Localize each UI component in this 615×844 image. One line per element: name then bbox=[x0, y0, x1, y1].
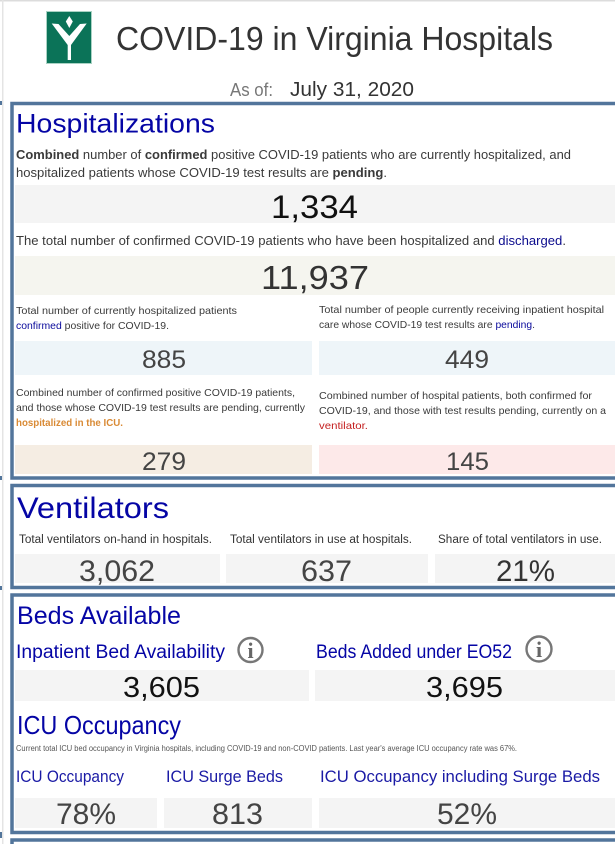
text: discharged description: The total number of confirmed COVID-19 patients who have been hospitalized and discharged. bbox=[16, 233, 566, 248]
stat: share in use: 21% bbox=[496, 555, 555, 588]
stat: ICU occupancy with surge: ICU Occupancy including Surge Beds bbox=[320, 768, 600, 786]
stat: ventilator bbox=[319, 445, 615, 476]
text: confirmed description bbox=[16, 305, 237, 332]
stat: ICU occupancy with surge: 52% bbox=[437, 798, 497, 831]
stat: pending bbox=[319, 341, 615, 375]
text: combined description bbox=[16, 147, 571, 180]
stat: ICU surge beds bbox=[164, 768, 312, 831]
stat: ICU occupancy: ICU Occupancy bbox=[16, 768, 125, 786]
stat: combined hospitalized bbox=[15, 185, 615, 225]
heading: beds available: Beds Available bbox=[17, 602, 181, 630]
text: ventilator description bbox=[319, 390, 606, 432]
text: ICU note: Current total ICU bed occupancy in Virginia hospitals, including COVID-19 and non-COVID patients. Last year's average ICU occupancy rate was 67%. bbox=[16, 744, 517, 753]
panel: ventilators bbox=[12, 486, 615, 588]
text: ICU description: hospitalized in the ICU. bbox=[16, 417, 123, 429]
heading: hospitalizations: Hospitalizations bbox=[16, 108, 215, 138]
stat: pending: 449 bbox=[445, 346, 489, 374]
stat: share in use bbox=[435, 534, 615, 588]
label: inpatient bed availability: Inpatient Bed Availability bbox=[16, 642, 226, 663]
heading: ICU occupancy: ICU Occupancy bbox=[17, 710, 181, 740]
icon: info: i bbox=[247, 638, 254, 663]
text: ICU description: Combined number of confirmed positive COVID-19 patients, bbox=[16, 387, 295, 399]
panel: beds available bbox=[12, 595, 615, 832]
stat: beds added bbox=[315, 670, 615, 704]
stat: confirmed: 885 bbox=[142, 346, 186, 374]
text: pending description: Total number of people currently receiving inpatient hospital bbox=[319, 304, 604, 316]
stat: ventilators on hand: 3,062 bbox=[79, 555, 155, 588]
stat: ICU: 279 bbox=[142, 448, 186, 476]
text: pending description bbox=[319, 304, 604, 331]
as-of date bbox=[230, 79, 414, 101]
stat: combined hospitalized: 1,334 bbox=[271, 189, 358, 225]
text: ventilator description: COVID-19, and those with test results pending, currently on a bbox=[319, 405, 606, 417]
text: pending description: care whose COVID-19 test results are pending. bbox=[319, 319, 535, 331]
icon: info bbox=[526, 636, 552, 662]
text: combined description: Combined number of confirmed positive COVID-19 patients who are currently hospitalized, and bbox=[16, 147, 571, 162]
stat: ICU occupancy: 78% bbox=[56, 798, 116, 831]
stat: ventilators on hand: Total ventilators on-hand in hospitals. bbox=[19, 534, 212, 546]
stat: ICU surge beds: ICU Surge Beds bbox=[166, 768, 283, 786]
as-of date: July 31, 2020 bbox=[290, 79, 414, 101]
stat: ventilators on hand bbox=[15, 534, 220, 588]
stat: ICU occupancy with surge bbox=[319, 768, 615, 831]
stat: ventilators in use: Total ventilators in use at hospitals. bbox=[230, 534, 412, 546]
label: beds added: Beds Added under EO52 bbox=[316, 642, 512, 663]
stat: confirmed bbox=[15, 341, 312, 375]
text: combined description: hospitalized patients whose COVID-19 test results are pending. bbox=[16, 165, 387, 180]
logo bbox=[46, 12, 92, 64]
stat: discharged bbox=[15, 256, 615, 296]
text: ICU description bbox=[16, 387, 306, 429]
text: ventilator description: ventilator. bbox=[319, 420, 368, 432]
heading: ventilators: Ventilators bbox=[17, 492, 169, 525]
stat: ventilators in use: 637 bbox=[301, 555, 352, 588]
text: ventilator description: Combined number of hospital patients, both confirmed for bbox=[319, 390, 592, 402]
stat: ICU occupancy bbox=[15, 768, 157, 831]
text: confirmed description: Total number of currently hospitalized patients bbox=[16, 305, 237, 317]
icon: info: i bbox=[536, 637, 542, 662]
icon: info bbox=[238, 638, 262, 663]
stat: share in use: Share of total ventilators in use. bbox=[438, 534, 602, 546]
stat: discharged: 11,937 bbox=[261, 259, 369, 296]
panel: next section (cut off) bbox=[12, 840, 615, 844]
panel: hospitalizations bbox=[12, 104, 615, 478]
stat: ventilator: 145 bbox=[446, 448, 489, 476]
stat: ventilators in use bbox=[226, 534, 428, 588]
stat: inpatient beds bbox=[15, 670, 309, 704]
text: ICU description: and those whose COVID-19 test results are pending, currently bbox=[16, 402, 306, 414]
title: COVID-19 in Virginia Hospitals bbox=[116, 20, 553, 57]
stat: ICU surge beds: 813 bbox=[212, 798, 263, 831]
stat: ICU bbox=[15, 445, 312, 476]
as-of date: As of: bbox=[230, 80, 273, 100]
stat: beds added: 3,695 bbox=[426, 672, 503, 704]
stat: inpatient beds: 3,605 bbox=[123, 672, 200, 704]
text: confirmed description: confirmed positive for COVID-19. bbox=[16, 320, 169, 332]
